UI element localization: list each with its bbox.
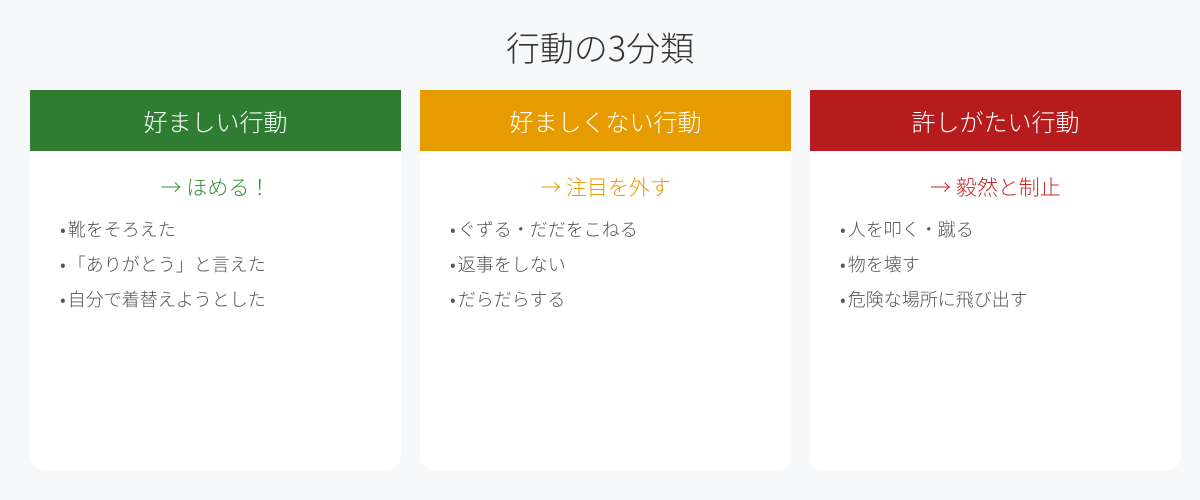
panel: unacceptable [810, 90, 1181, 470]
list: unacceptable examples: 危険な場所に飛び出す [848, 286, 1028, 312]
panel: preferable [30, 90, 401, 470]
list: unacceptable examples: 人を叩く・蹴る [848, 216, 974, 242]
subheading: stop: → 毅然と制止 [930, 172, 1061, 202]
subheading: praise: → ほめる！ [161, 172, 270, 202]
panel: not preferable [420, 90, 791, 470]
header: unacceptable [810, 90, 1181, 151]
title: 行動の3分類 [506, 22, 694, 71]
list: preferable examples: 靴をそろえた [68, 216, 176, 242]
list: preferable examples [60, 216, 266, 312]
header: not preferable: 好ましくない行動 [510, 103, 702, 138]
list: not preferable examples [450, 216, 638, 312]
list: not preferable examples: だらだらする [458, 286, 565, 312]
list: preferable examples: 「ありがとう」と言えた [68, 251, 266, 277]
list: unacceptable examples: 物を壊す [848, 251, 920, 277]
list: unacceptable examples [840, 216, 1028, 312]
list: not preferable examples: 返事をしない [458, 251, 566, 277]
subheading: ignore: → 注目を外す [540, 172, 671, 202]
header: preferable [30, 90, 401, 151]
header: preferable: 好ましい行動 [144, 103, 288, 138]
list: preferable examples: 自分で着替えようとした [68, 286, 266, 312]
list: not preferable examples: ぐずる・だだをこねる [458, 216, 638, 242]
header: not preferable [420, 90, 791, 151]
header: unacceptable: 許しがたい行動 [912, 103, 1080, 138]
